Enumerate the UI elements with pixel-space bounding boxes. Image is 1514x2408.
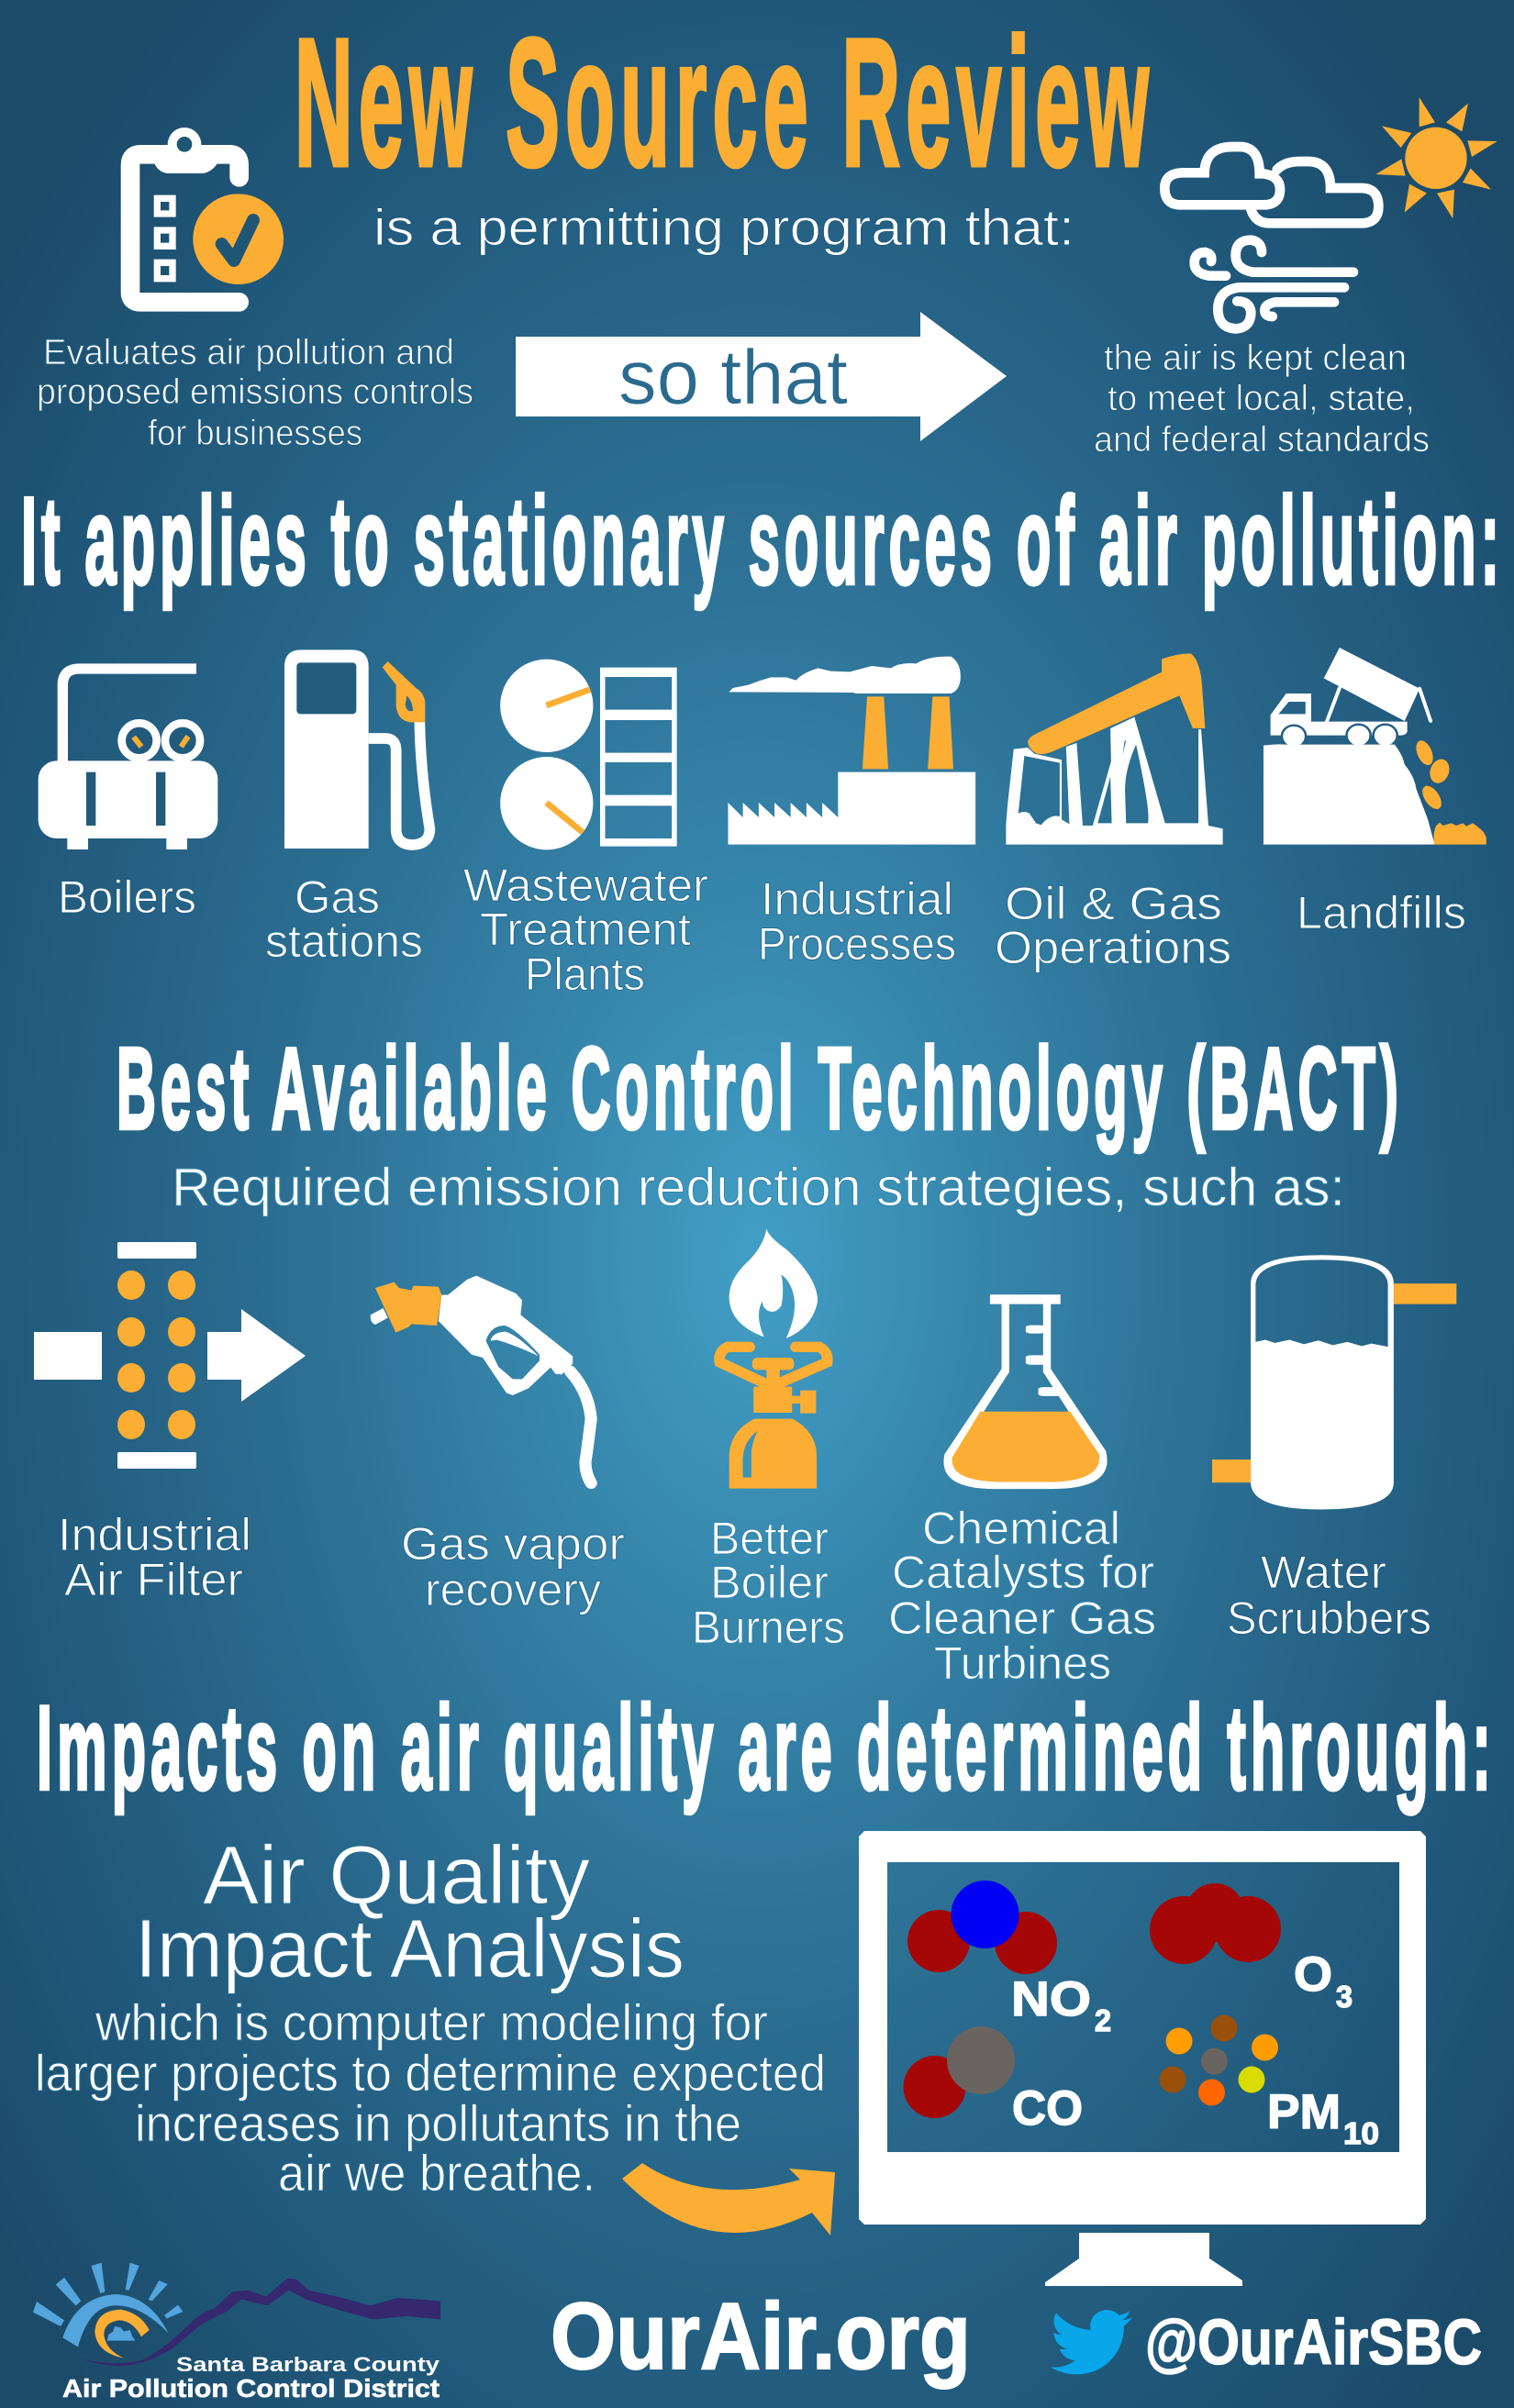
icon: clipboard with checkmark	[130, 128, 284, 302]
monitor with pollutants	[859, 1831, 1426, 2286]
text: evaluates: for businesses	[148, 414, 362, 453]
arrow: so that: so that	[618, 334, 848, 420]
monitor stand	[1045, 2233, 1242, 2286]
icon: gas vapor recovery nozzle	[371, 1276, 591, 1483]
icon: landfill with dump truck	[1264, 648, 1486, 845]
text: computer modeling description	[35, 1993, 826, 2202]
subheading: strategies: Required emission reduction strategies, such as:	[172, 1158, 1345, 1217]
icon: boiler	[39, 669, 217, 849]
text: air quality impact analysis: Air Quality	[203, 1830, 590, 1922]
label: gas stations: Gas	[295, 871, 380, 923]
molecule: O3	[1150, 1883, 1353, 2014]
label: gas stations	[265, 871, 423, 967]
label: wastewater treatment plants: Wastewater	[463, 860, 708, 911]
text: computer modeling description: which is computer modeling for	[95, 1993, 768, 2051]
particles: PM10	[1160, 2014, 1379, 2150]
label: industrial processes	[758, 873, 956, 970]
icon: oil pump jack	[1006, 654, 1223, 845]
label: oil and gas operations: Oil & Gas	[1005, 878, 1222, 929]
label: industrial processes: Processes	[758, 918, 956, 970]
label: chemical catalysts: Catalysts for	[892, 1547, 1154, 1598]
text: the air is kept clean: and federal standards	[1094, 420, 1430, 460]
text: the air is kept clean: the air is kept clean	[1104, 338, 1407, 378]
molecule: CO: CO	[1012, 2081, 1083, 2136]
molecule: NO2: NO	[1011, 1972, 1091, 2026]
label: water scrubbers: Scrubbers	[1227, 1592, 1431, 1644]
molecule: NO2: 2	[1095, 2003, 1111, 2037]
label: boilers: Boilers	[58, 871, 196, 923]
website: OurAir.org	[551, 2283, 971, 2389]
label: gas vapor recovery: recovery	[425, 1564, 601, 1615]
label: better boiler burners	[692, 1513, 845, 1653]
logo: Santa Barbara County APCD: Santa Barbara County	[176, 2353, 440, 2376]
monitor frame	[859, 1831, 1426, 2225]
text: air quality impact analysis	[135, 1830, 685, 1995]
icon: factory	[728, 657, 975, 845]
label: gas vapor recovery: Gas vapor	[401, 1518, 625, 1570]
label: chemical catalysts: Cleaner Gas	[888, 1592, 1156, 1644]
arrow: curved	[622, 2163, 835, 2236]
text: air quality impact analysis: Impact Analysis	[135, 1903, 685, 1995]
label: water scrubbers: Water	[1261, 1547, 1386, 1598]
label: chemical catalysts	[888, 1503, 1156, 1689]
label: chemical catalysts: Chemical	[922, 1503, 1120, 1554]
icon: wastewater treatment tanks	[500, 660, 677, 849]
text: computer modeling description: larger projects to determine expected	[35, 2044, 826, 2102]
label: wastewater treatment plants: Treatment	[480, 904, 691, 955]
text: the air is kept clean	[1094, 338, 1430, 460]
label: gas stations: stations	[265, 915, 423, 967]
label: oil and gas operations	[995, 878, 1231, 973]
label: chemical catalysts: Turbines	[934, 1637, 1111, 1689]
label: wastewater treatment plants: Plants	[525, 949, 645, 1000]
label: industrial air filter	[58, 1509, 251, 1605]
label: landfills: Landfills	[1297, 887, 1466, 938]
label: industrial air filter: Air Filter	[64, 1554, 243, 1605]
particles: PM10: PM	[1267, 2085, 1341, 2139]
label: better boiler burners: Better	[710, 1513, 829, 1564]
label: better boiler burners: Boiler	[710, 1557, 829, 1608]
logo: Santa Barbara County APCD	[33, 2263, 440, 2402]
molecule: O3: 3	[1336, 1980, 1353, 2014]
icon: industrial air filter	[34, 1242, 306, 1469]
icon: twitter bird	[1051, 2310, 1132, 2374]
icon: chemical flask	[943, 1294, 1108, 1489]
arrow: so that	[516, 312, 1007, 441]
label: water scrubbers	[1227, 1547, 1431, 1644]
molecule: NO2	[907, 1881, 1111, 2037]
text: the air is kept clean: to meet local, state,	[1108, 379, 1415, 418]
molecule: O3: O	[1294, 1947, 1332, 2002]
label: wastewater treatment plants	[463, 860, 708, 1000]
text: evaluates: Evaluates air pollution and	[43, 333, 454, 372]
label: better boiler burners: Burners	[692, 1602, 845, 1653]
icon: boiler burner and flame	[719, 1228, 828, 1489]
icon: gas pump	[284, 649, 429, 849]
label: industrial air filter: Industrial	[58, 1509, 251, 1560]
icon: water scrubber	[1212, 1255, 1456, 1509]
subtitle: is a permitting program that:	[373, 198, 1074, 256]
icon: clouds, wind and sun	[1164, 97, 1497, 328]
particles: PM10: 10	[1343, 2116, 1379, 2150]
molecule: CO	[903, 2026, 1083, 2136]
text: computer modeling description: air we breathe.	[278, 2144, 596, 2202]
logo: Santa Barbara County APCD: Air Pollution Control District	[62, 2374, 440, 2402]
label: gas vapor recovery	[401, 1518, 625, 1615]
text: evaluates: proposed emissions controls	[37, 372, 473, 412]
text: computer modeling description: increases in pollutants in the	[135, 2094, 741, 2152]
label: oil and gas operations: Operations	[995, 922, 1231, 973]
label: industrial processes: Industrial	[761, 873, 953, 925]
text: evaluates	[37, 333, 473, 453]
